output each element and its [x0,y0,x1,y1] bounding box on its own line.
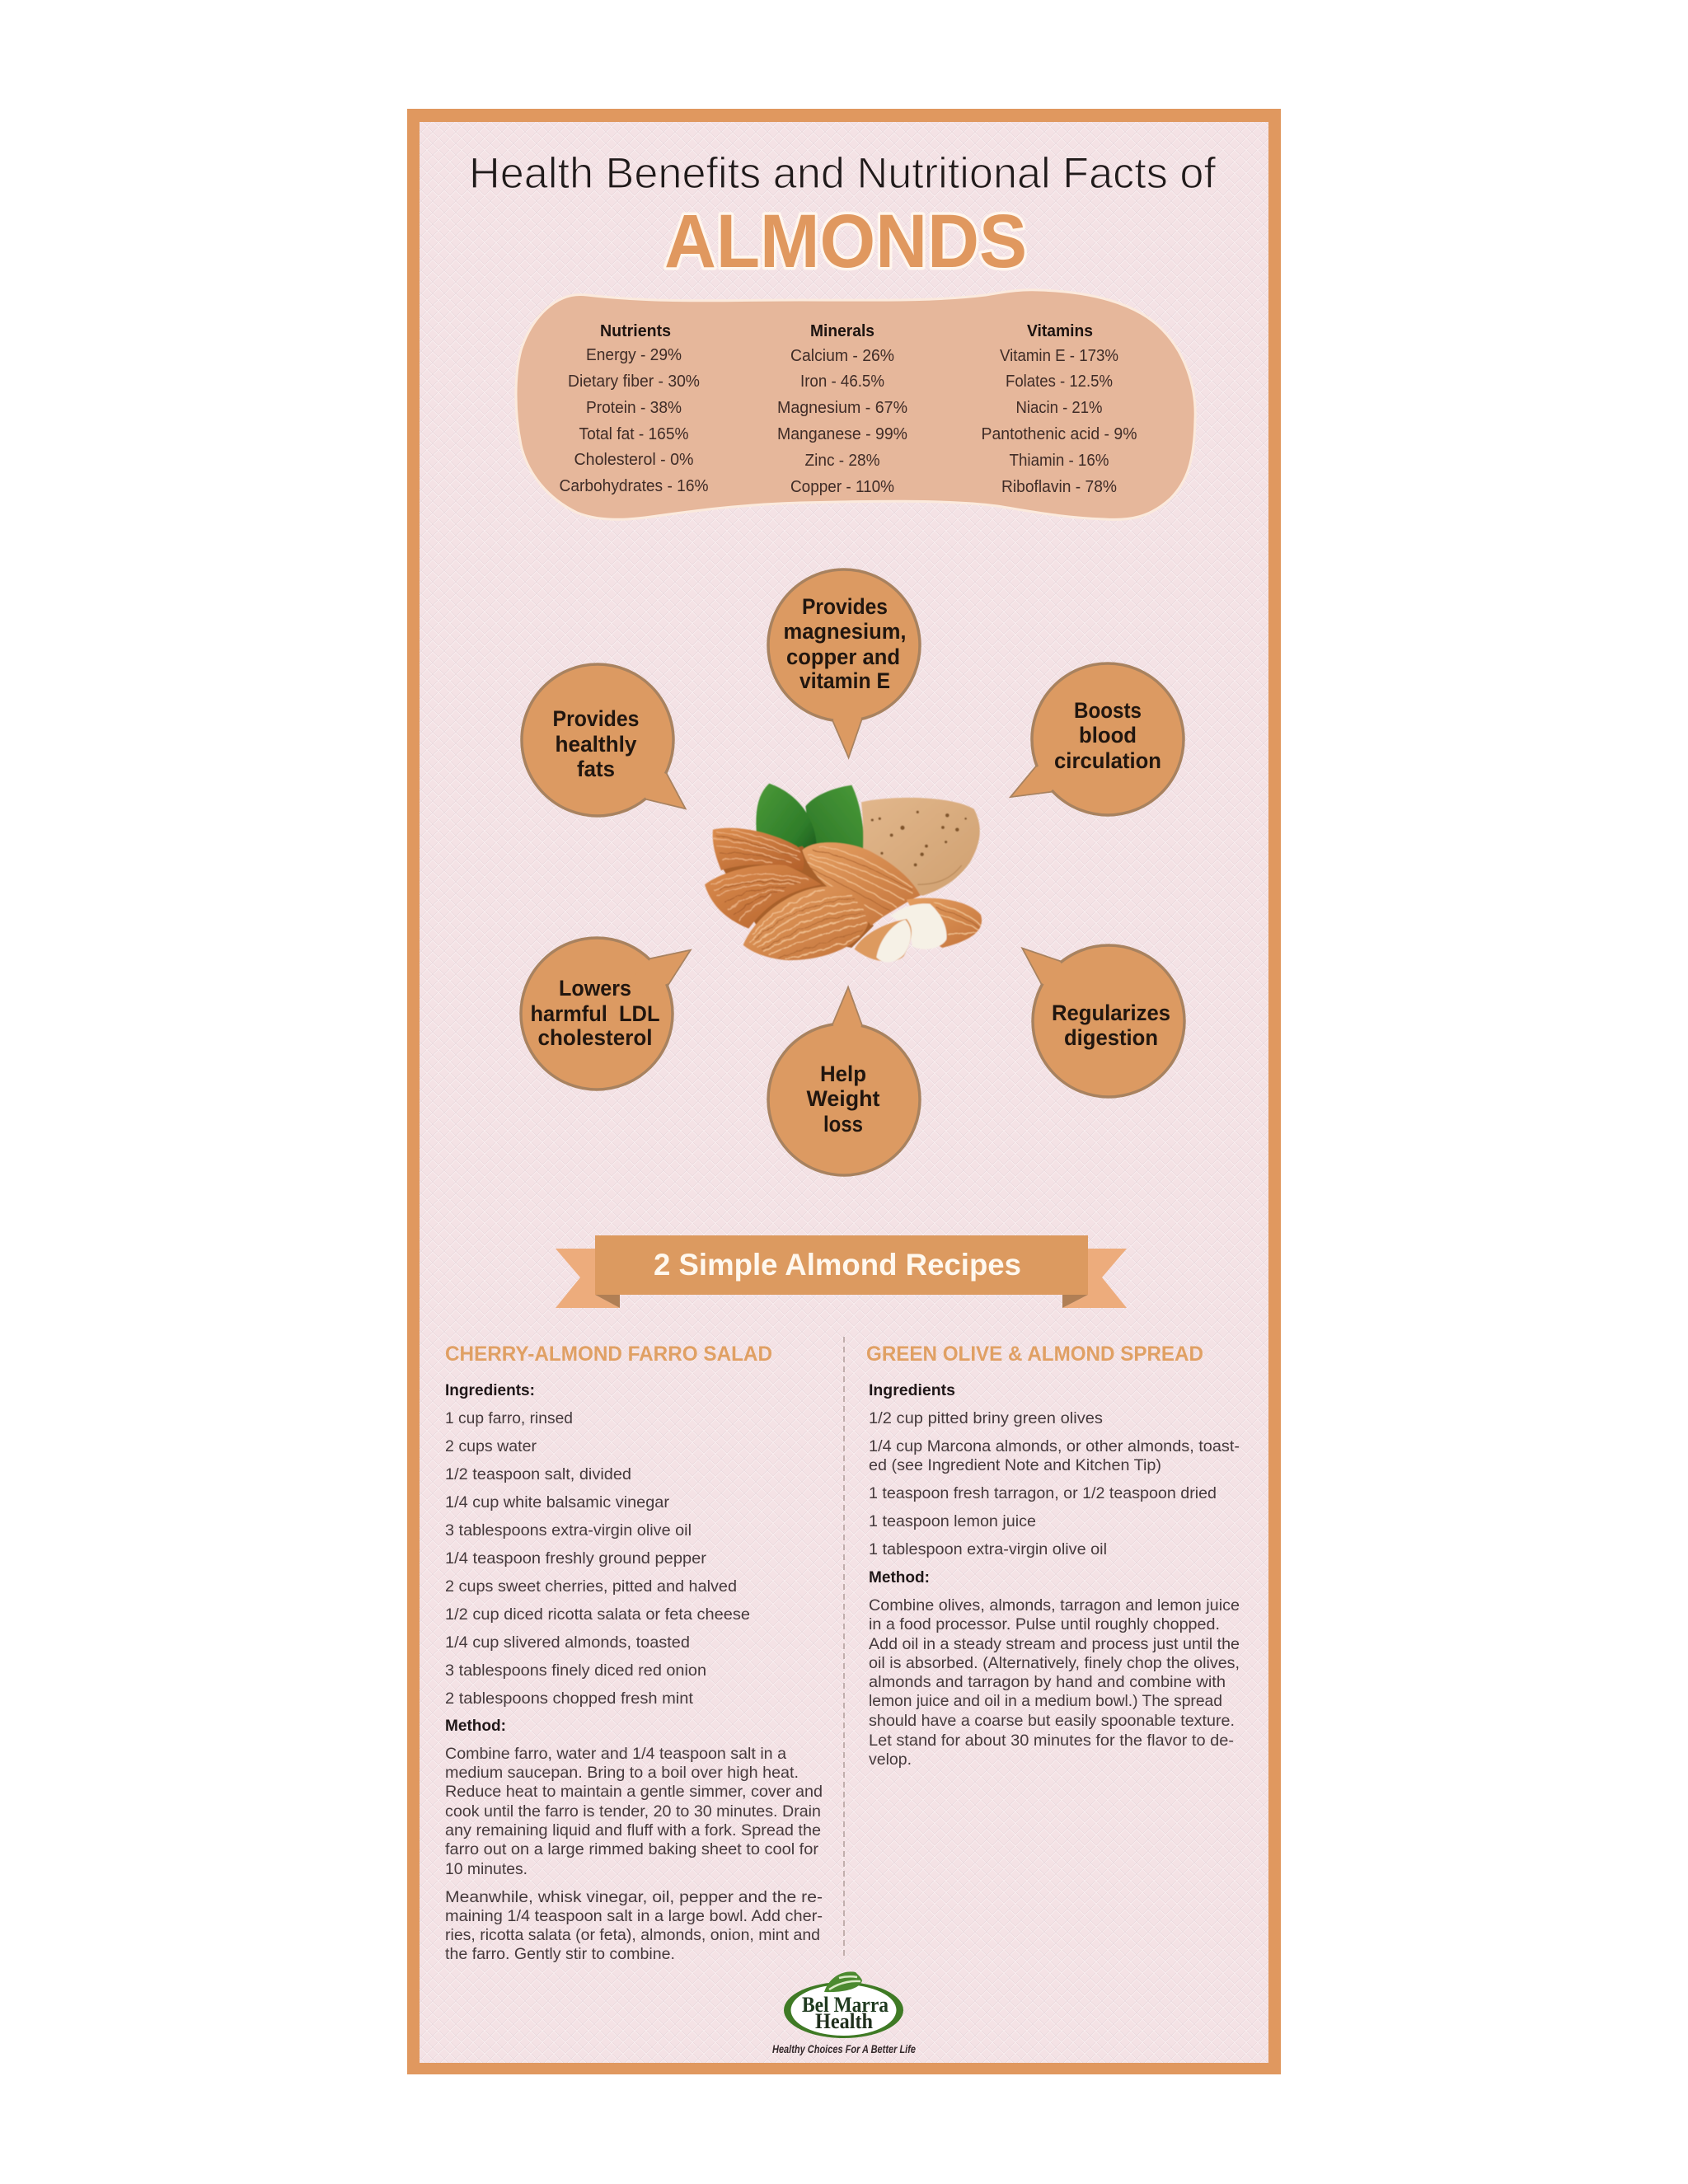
panel: nutrition table blob [516,290,1195,519]
ingredients list: 1/4 teaspoon freshly ground pepper [445,1549,707,1568]
ingredients list [869,1381,1240,1558]
method text: should have a coarse but easily spoonable texture. [869,1712,1235,1730]
logo: Bel Marra Health: Healthy Choices For A Better Life [772,2042,916,2055]
callout: LDL cholesterol [521,938,689,1090]
ingredients list [445,1381,750,1708]
method text [445,1717,823,1963]
icon: almonds with leaves [705,784,982,963]
vitamins column: Vitamins [1027,322,1093,340]
vitamins column: Niacin - 21% [1015,399,1103,417]
callout: healthy fats: fats [577,757,615,781]
minerals column: Copper - 110% [790,478,894,496]
panel: infographic frame [407,109,1281,2074]
method text: in a food processor. Pulse until roughly chopped. [869,1615,1220,1633]
panel: green olive and almond spread recipe [866,1343,1240,1769]
nutrients column: Cholesterol - 0% [574,451,694,469]
vitamins column: Thiamin - 16% [1009,452,1109,470]
panel: green olive and almond spread recipe: GREEN OLIVE & ALMOND SPREAD [866,1343,1203,1366]
nutrients column: Nutrients [600,322,671,340]
ingredients list: 2 tablespoons chopped fresh mint [445,1690,694,1708]
minerals column: Minerals [810,322,874,340]
ingredients list: 1/2 teaspoon salt, divided [445,1465,631,1483]
nutrients column: Dietary fiber - 30% [568,373,700,391]
nutrients column: Energy - 29% [586,346,682,364]
ingredients list: 1 teaspoon lemon juice [869,1512,1036,1530]
title: Health Benefits and Nutritional Facts of [469,149,1216,198]
callout: blood circulation: Boosts [1074,698,1142,723]
ingredients list: 1/4 cup Marcona almonds, or other almonds, toast- [869,1437,1240,1455]
vitamins column [981,322,1137,496]
method text: Reduce heat to maintain a gentle simmer, cover and [445,1783,823,1801]
method text: any remaining liquid and fluff with a fork. Spread the [445,1821,821,1840]
ingredients list: Ingredients [869,1381,955,1399]
ingredients list: 1/2 cup pitted briny green olives [869,1409,1103,1427]
method text: oil is absorbed. (Alternatively, finely chop the olives, [869,1654,1240,1672]
method text: medium saucepan. Bring to a boil over high heat. [445,1764,799,1782]
ingredients list: 1 cup farro, rinsed [445,1409,573,1427]
callout: blood circulation: blood [1079,723,1137,748]
callout: magnesium, copper, vitamin E [768,569,920,756]
banner: 2 Simple Almond Recipes [556,1235,1127,1308]
callout: blood circulation [1012,663,1184,815]
method text: 10 minutes. [445,1860,528,1878]
ingredients list: 2 cups sweet cherries, pitted and halved [445,1577,737,1596]
callout: weight loss: Help [820,1062,866,1086]
callout: magnesium, copper, vitamin E: vitamin E [799,668,890,693]
method text: velop. [869,1750,912,1769]
callout: magnesium, copper, vitamin E: Provides [802,594,888,619]
banner: 2 Simple Almond Recipes: 2 Simple Almond Recipes [654,1248,1021,1282]
vitamins column: Pantothenic acid - 9% [981,425,1137,443]
panel: cherry-almond farro salad recipe: CHERRY-ALMOND FARRO SALAD [445,1343,772,1366]
minerals column: Calcium - 26% [790,347,894,365]
method text: almonds and tarragon by hand and combine with [869,1673,1226,1691]
callout: healthy fats [522,664,684,816]
callout: LDL cholesterol: cholesterol [537,1025,653,1050]
method text [869,1568,1240,1769]
nutrients column: Protein - 38% [586,399,682,417]
logo: Bel Marra Health [772,1971,916,2055]
ingredients list: 1/2 cup diced ricotta salata or feta cheese [445,1605,750,1624]
callout: LDL cholesterol: Lowers [559,976,631,1001]
heading: ALMONDS: ALMONDS [664,199,1027,284]
divider [843,1337,845,1958]
method text: maining 1/4 teaspoon salt in a large bowl. Add cher- [445,1907,823,1925]
ingredients list: 2 cups water [445,1437,537,1455]
callout: weight loss [768,989,920,1175]
method text: Combine olives, almonds, tarragon and lemon juice [869,1596,1240,1615]
method text: Meanwhile, whisk vinegar, oil, pepper and the re- [445,1888,823,1906]
method text: the farro. Gently stir to combine. [445,1945,675,1963]
vitamins column: Folates - 12.5% [1006,373,1113,391]
ingredients list: 1 tablespoon extra-virgin olive oil [869,1540,1107,1558]
ingredients list: Ingredients: [445,1381,535,1399]
ingredients list: 1/4 cup slivered almonds, toasted [445,1633,690,1652]
callout: magnesium, copper, vitamin E: magnesium, [783,619,907,644]
callout: magnesium, copper, vitamin E: copper and [786,644,900,669]
method text: Combine farro, water and 1/4 teaspoon salt in a [445,1745,786,1763]
ingredients list: 3 tablespoons finely diced red onion [445,1661,706,1680]
nutrients column: Carbohydrates - 16% [559,477,709,495]
method text: ries, ricotta salata (or feta), almonds, onion, mint and [445,1926,820,1944]
logo: Bel Marra Health: Health [815,2009,873,2033]
minerals column: Iron - 46.5% [800,373,884,391]
nutrients column: Total fat - 165% [579,425,689,443]
ingredients list: 1/4 cup white balsamic vinegar [445,1493,670,1511]
vitamins column: Vitamin E - 173% [1000,347,1118,365]
method text: cook until the farro is tender, 20 to 30 minutes. Drain [445,1802,821,1821]
method text: Add oil in a steady stream and process just until the [869,1635,1240,1653]
callout: healthy fats: Provides [552,706,640,731]
callout: digestion [1024,945,1184,1097]
callout: digestion: digestion [1064,1025,1158,1050]
minerals column [777,322,907,496]
callout: healthy fats: healthly [556,732,636,757]
ingredients list: 3 tablespoons extra-virgin olive oil [445,1521,692,1540]
method text: Let stand for about 30 minutes for the flavor to de- [869,1732,1234,1750]
minerals column: Magnesium - 67% [777,399,907,417]
ingredients list: ed (see Ingredient Note and Kitchen Tip) [869,1456,1161,1474]
callout: weight loss: loss [823,1112,863,1137]
method text: lemon juice and oil in a medium bowl.) The spread [869,1692,1222,1710]
ingredients list: 1 teaspoon fresh tarragon, or 1/2 teaspoon dried [869,1484,1217,1502]
panel: cherry-almond farro salad recipe [445,1343,823,1963]
vitamins column: Riboflavin - 78% [1001,478,1117,496]
method text: farro out on a large rimmed baking sheet to cool for [445,1840,819,1858]
callout: digestion: Regularizes [1052,1001,1170,1025]
method text: Method: [869,1568,930,1586]
minerals column: Zinc - 28% [804,452,880,470]
callout: LDL cholesterol: harmful LDL [531,1001,659,1026]
callout: blood circulation: circulation [1054,748,1161,773]
nutrients column [559,322,709,495]
method text: Method: [445,1717,506,1735]
logo: Bel Marra Health: Bel Marra [802,1993,889,2017]
minerals column: Manganese - 99% [777,425,907,443]
callout: weight loss: Weight [806,1086,880,1111]
